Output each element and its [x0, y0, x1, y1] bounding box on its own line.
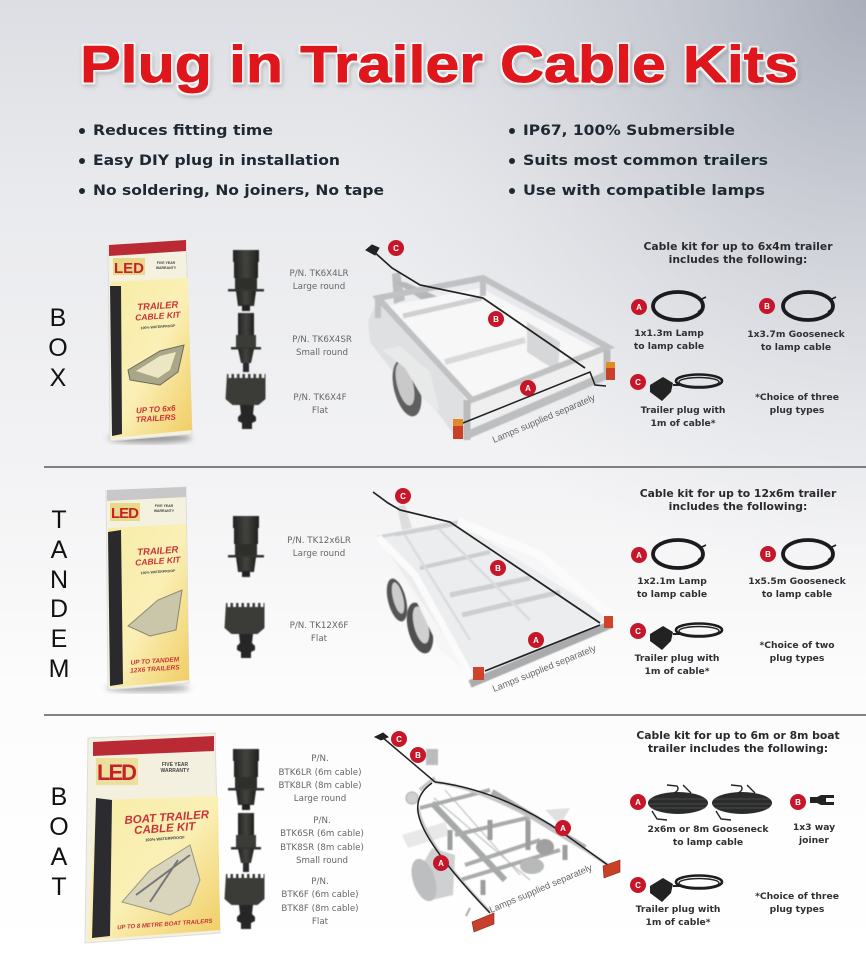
side label: TANDEM: E: [51, 625, 67, 653]
part numbers: tandem kit: Large round: [293, 549, 345, 559]
item A: lamp cable: A: [636, 551, 642, 560]
item B: gooseneck cable: to lamp cable: [761, 342, 831, 353]
feature list: right: [509, 123, 768, 199]
item A: lamp cable: [631, 292, 706, 352]
item A: lamp cable: A: [636, 303, 642, 312]
product package: box kit: CABLE KIT: [135, 309, 182, 323]
side label: BOX: X: [50, 364, 67, 392]
item B: gooseneck cable: [747, 292, 846, 353]
part numbers: box kit: Flat: [312, 406, 329, 416]
part numbers: tandem kit: P/N. TK12X6F: [290, 621, 348, 631]
kit contents: boat: [630, 729, 840, 928]
cables: boat: [375, 733, 612, 913]
plugs: box kit: [226, 250, 266, 429]
side label: TANDEM: M: [49, 655, 69, 683]
section: tandem trailer: [49, 487, 847, 694]
note: plug choice: *Choice of three: [755, 891, 839, 902]
item A: gooseneck cables: A: [635, 798, 641, 807]
side label: TANDEM: T: [51, 506, 67, 534]
item B: gooseneck cable: 1x3.7m Gooseneck: [747, 329, 846, 340]
part numbers: boat kit: P/N.: [311, 754, 329, 764]
product package: box kit: 100% WATERPROOF: [140, 324, 176, 330]
item B: joiner: [790, 794, 835, 846]
part numbers: boat kit: P/N.: [313, 816, 331, 826]
part numbers: boat kit: [278, 754, 364, 927]
item B: gooseneck cable: to lamp cable: [762, 589, 832, 600]
badges: box trailer: C: [393, 244, 399, 253]
note: lamps supplied: Lamps supplied separately: [488, 862, 594, 915]
item C: trailer plug: Trailer plug with: [641, 405, 725, 416]
tail lamps: tandem: [473, 616, 613, 680]
product package: tandem kit: TRAILER: [137, 545, 179, 558]
item C: trailer plug: [630, 623, 722, 677]
note: plug choice: [755, 891, 839, 915]
product package: tandem kit: LED: [111, 505, 139, 522]
badges: box trailer: B: [493, 315, 499, 324]
product package: boat kit: FIVE YEAR: [162, 762, 189, 768]
item C: trailer plug: C: [635, 627, 641, 636]
kit contents: box: Cable kit for up to 6x4m trailer: [643, 240, 833, 253]
plugs: tandem kit: [224, 516, 264, 658]
product package: boat kit: [85, 733, 220, 943]
side label: BOAT: A: [51, 843, 68, 871]
side label: TANDEM: D: [50, 595, 68, 623]
note: plug choice: [755, 392, 839, 416]
feature list: right: Use with compatible lamps: [523, 183, 765, 199]
product package: tandem kit: WARRANTY: [154, 509, 175, 513]
badges: tandem trailer: [395, 488, 544, 648]
badges: boat trailer: [391, 731, 571, 871]
note: plug choice: [759, 640, 835, 664]
item A: gooseneck cables: [630, 785, 772, 848]
side label: TANDEM: N: [50, 566, 68, 594]
feature list: right: IP67, 100% Submersible: [523, 123, 735, 139]
part numbers: boat kit: BTK6LR (6m cable): [278, 768, 362, 778]
part numbers: boat kit: BTK6F (6m cable): [281, 890, 359, 900]
side label: TANDEM: A: [51, 536, 68, 564]
side label: BOX: O: [48, 334, 68, 362]
badges: tandem trailer: A: [533, 636, 539, 645]
part numbers: box kit: P/N. TK6X4SR: [292, 335, 352, 345]
badges: boat trailer: A: [438, 859, 444, 868]
product package: tandem kit: 12X6 TRAILERS: [130, 664, 180, 675]
item C: trailer plug: Trailer plug with: [636, 904, 720, 915]
item C: trailer plug: 1m of cable*: [644, 666, 710, 677]
part numbers: tandem kit: [287, 536, 351, 644]
product package: tandem kit: CABLE KIT: [135, 554, 182, 568]
part numbers: boat kit: P/N.: [311, 877, 329, 887]
side label: BOX: [48, 304, 68, 392]
item A: gooseneck cables: 2x6m or 8m Gooseneck: [648, 824, 769, 835]
badges: boat trailer: B: [415, 751, 421, 760]
side label: BOX: B: [50, 304, 66, 332]
product package: tandem kit: FIVE YEAR: [155, 504, 174, 508]
product package: box kit: TRAILERS: [136, 413, 177, 424]
part numbers: boat kit: BTK8LR (8m cable): [278, 781, 362, 791]
item B: joiner: joiner: [798, 835, 829, 846]
product package: tandem kit: [106, 487, 190, 692]
feature list: right: Suits most common trailers: [523, 153, 768, 169]
title: Plug in Trailer Cable Kits: [80, 36, 798, 94]
section: box trailer: [48, 240, 846, 445]
side label: BOAT: [49, 783, 69, 901]
part numbers: tandem kit: Flat: [311, 634, 328, 644]
feature list: left: No soldering, No joiners, No tape: [93, 183, 384, 199]
part numbers: boat kit: Flat: [312, 917, 329, 927]
tail lamps: box: [453, 362, 615, 439]
kit contents: boat: trailer includes the following:: [648, 742, 828, 755]
product package: box kit: UP TO 6x6: [136, 404, 176, 415]
note: plug choice: plug types: [770, 904, 825, 915]
product package: boat kit: WARRANTY: [161, 768, 190, 774]
badges: tandem trailer: C: [400, 492, 406, 501]
product package: box kit: TRAILER: [137, 300, 179, 313]
item C: trailer plug: [630, 374, 725, 429]
kit contents: tandem: Cable kit for up to 12x6m trailer: [640, 487, 837, 500]
kit contents: tandem: includes the following:: [669, 500, 807, 513]
product package: tandem kit: UP TO TANDEM: [130, 656, 180, 667]
item B: gooseneck cable: 1x5.5m Gooseneck: [748, 576, 847, 587]
product package: boat kit: UP TO 8 METRE BOAT TRAILERS: [117, 919, 213, 931]
product package: boat kit: 100% WATERPROOF: [145, 835, 185, 842]
item B: gooseneck cable: [748, 540, 847, 600]
part numbers: box kit: Large round: [293, 282, 345, 292]
kit contents: tandem: [630, 487, 847, 677]
item C: trailer plug: [630, 876, 722, 928]
item C: trailer plug: C: [635, 881, 641, 890]
item A: lamp cable: 1x1.3m Lamp: [634, 328, 704, 339]
cables: tandem: [373, 492, 600, 671]
product package: boat kit: LED: [97, 760, 137, 785]
item B: gooseneck cable: B: [764, 302, 770, 311]
note: plug choice: *Choice of two: [759, 640, 835, 651]
badges: tandem trailer: B: [495, 564, 501, 573]
part numbers: boat kit: BTK8F (8m cable): [281, 904, 359, 914]
item B: joiner: B: [795, 798, 801, 807]
part numbers: boat kit: BTK8SR (8m cable): [280, 843, 364, 853]
note: lamps supplied: Lamps supplied separately: [491, 392, 597, 445]
product package: boat kit: BOAT TRAILER: [124, 809, 210, 827]
note: plug choice: plug types: [770, 405, 825, 416]
tail lamps: boat: [472, 860, 620, 932]
trailer diagram: tandem: [373, 488, 613, 694]
item A: lamp cable: to lamp cable: [637, 589, 707, 600]
product package: box kit: LED: [114, 260, 144, 277]
part numbers: boat kit: BTK6SR (6m cable): [280, 829, 364, 839]
note: plug choice: *Choice of three: [755, 392, 839, 403]
kit contents: box: includes the following:: [669, 253, 807, 266]
badges: boat trailer: A: [560, 824, 566, 833]
note: lamps supplied: Lamps supplied separately: [491, 643, 598, 694]
item B: joiner: 1x3 way: [793, 822, 835, 833]
trailer diagram: box: [366, 240, 615, 445]
part numbers: box kit: Small round: [296, 348, 348, 358]
item A: lamp cable: 1x2.1m Lamp: [637, 576, 707, 587]
product package: tandem kit: 100% WATERPROOF: [140, 569, 176, 575]
part numbers: tandem kit: P/N. TK12x6LR: [287, 536, 351, 546]
part numbers: box kit: [289, 269, 352, 416]
part numbers: box kit: P/N. TK6X4LR: [289, 269, 349, 279]
item C: trailer plug: 1m of cable*: [650, 418, 716, 429]
feature list: left: [79, 123, 384, 199]
kit contents: box: [630, 240, 846, 429]
product package: boat kit: CABLE KIT: [134, 821, 197, 837]
item A: lamp cable: to lamp cable: [634, 341, 704, 352]
side label: TANDEM: [49, 506, 69, 683]
side label: BOAT: O: [49, 813, 69, 841]
part numbers: boat kit: Small round: [296, 856, 348, 866]
plugs: boat kit: [224, 749, 264, 929]
note: plug choice: plug types: [770, 653, 825, 664]
feature list: left: Reduces fitting time: [93, 123, 273, 139]
feature list: left: Easy DIY plug in installation: [93, 153, 340, 169]
badges: box trailer: A: [525, 384, 531, 393]
item C: trailer plug: 1m of cable*: [645, 917, 711, 928]
item C: trailer plug: C: [635, 378, 641, 387]
badges: boat trailer: C: [396, 735, 402, 744]
product package: box kit: [108, 240, 192, 443]
item A: lamp cable: [631, 540, 707, 600]
trailer diagram: boat: [375, 731, 620, 932]
section: boat trailer: [49, 729, 840, 943]
product package: box kit: WARRANTY: [156, 266, 177, 270]
part numbers: box kit: P/N. TK6X4F: [293, 393, 347, 403]
kit contents: boat: Cable kit for up to 6m or 8m boat: [636, 729, 840, 742]
cables: box: [366, 245, 606, 423]
item A: gooseneck cables: to lamp cable: [673, 837, 743, 848]
part numbers: boat kit: Large round: [294, 794, 346, 804]
side label: BOAT: B: [51, 783, 67, 811]
product package: box kit: FIVE YEAR: [157, 261, 176, 265]
item C: trailer plug: Trailer plug with: [635, 653, 719, 664]
item B: gooseneck cable: B: [765, 550, 771, 559]
side label: BOAT: T: [51, 873, 67, 901]
badges: box trailer: [388, 240, 536, 396]
